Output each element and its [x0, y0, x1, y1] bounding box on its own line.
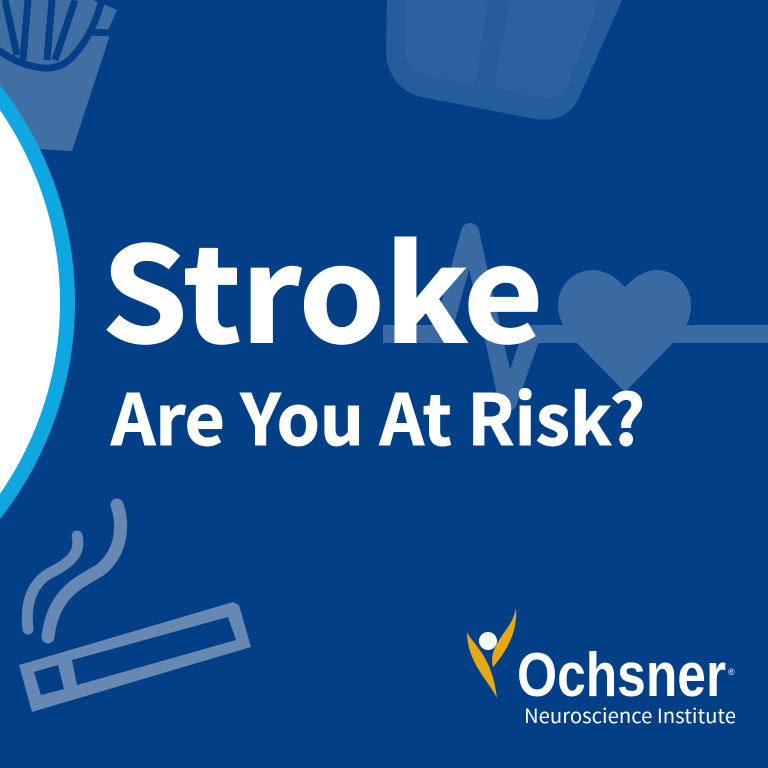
icon: food tray: [386, 0, 622, 120]
logo wordmark: Ochsner: [517, 641, 726, 710]
white circle with cyan ring: [0, 0, 68, 646]
icon: french fries: [0, 0, 117, 151]
registered mark: ®: [728, 667, 735, 677]
subtitle: Are You At Risk?: [110, 365, 645, 466]
title: Stroke: [102, 190, 543, 380]
logo figure: head: [479, 632, 497, 650]
icon: cigarette: [19, 505, 251, 712]
icon: heartbeat line: [383, 232, 768, 402]
logo: Ochsner Neuroscience Institute: [467, 608, 736, 729]
logo figure: gold arms: [467, 608, 516, 698]
icon: heart: [558, 270, 691, 392]
logo tagline: Neuroscience Institute: [524, 700, 736, 729]
